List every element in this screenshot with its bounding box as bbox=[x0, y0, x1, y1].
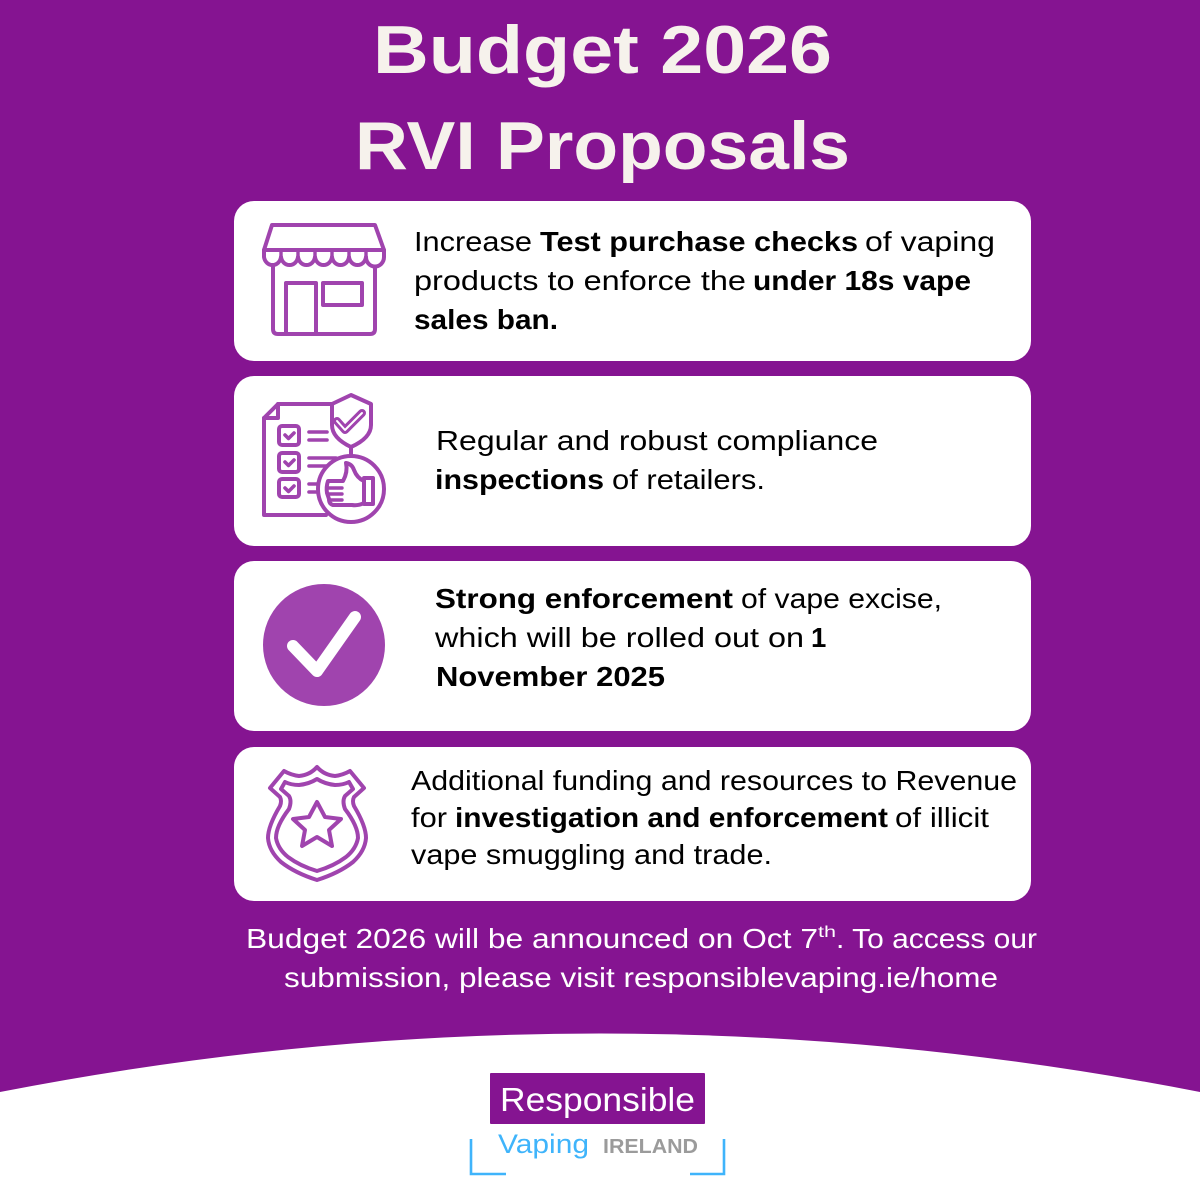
logo: Responsible Vaping Ireland bbox=[471, 1073, 724, 1174]
text: test purchase checks: under 18s vape bbox=[753, 265, 971, 296]
text: funding and resources bbox=[411, 765, 1017, 870]
text: excise enforcement: which will be rolled out on bbox=[434, 622, 804, 653]
text: compliance inspections: inspections bbox=[435, 464, 604, 495]
announcement text bbox=[246, 923, 1037, 993]
text: excise enforcement: 1 bbox=[811, 622, 826, 653]
announcement text: . To access our bbox=[836, 923, 1037, 954]
logo: Responsible Vaping Ireland: Vaping bbox=[498, 1129, 589, 1159]
panel: funding and resources bbox=[234, 747, 1031, 901]
title: RVI Proposals bbox=[355, 108, 850, 184]
panel: compliance inspections bbox=[234, 376, 1031, 546]
white curved footer area bbox=[0, 1034, 1200, 1200]
announcement text: th bbox=[818, 924, 836, 941]
text: funding and resources: Additional funding and resources to Revenue bbox=[411, 765, 1017, 796]
text: test purchase checks: Increase bbox=[414, 226, 532, 257]
logo: Responsible Vaping Ireland: IRELAND bbox=[603, 1136, 698, 1158]
text: excise enforcement: Strong enforcement bbox=[435, 583, 733, 614]
text: compliance inspections: of retailers. bbox=[612, 464, 765, 495]
icon: check mark circle bbox=[263, 584, 385, 706]
logo: Responsible Vaping Ireland: Responsible bbox=[500, 1081, 695, 1118]
text: test purchase checks: of vaping bbox=[865, 226, 995, 257]
title: Budget 2026 bbox=[373, 12, 832, 88]
text: test purchase checks: products to enforce the bbox=[414, 265, 746, 296]
text: test purchase checks: sales ban. bbox=[414, 304, 558, 335]
text: funding and resources: investigation and enforcement bbox=[455, 802, 888, 833]
text: excise enforcement bbox=[434, 583, 942, 692]
panel: test purchase checks bbox=[234, 201, 1031, 361]
text: compliance inspections: Regular and robust compliance bbox=[436, 425, 878, 456]
icon: checklist with shield and thumbs up bbox=[264, 395, 384, 522]
icon: police badge bbox=[268, 767, 366, 880]
text: test purchase checks bbox=[414, 226, 995, 335]
announcement text: submission, please visit responsiblevaping.ie/home bbox=[284, 962, 998, 993]
text: funding and resources: vape smuggling and trade. bbox=[411, 839, 772, 870]
panel: excise enforcement bbox=[234, 561, 1031, 731]
text: excise enforcement: of vape excise, bbox=[741, 583, 942, 614]
text: funding and resources: for bbox=[411, 802, 447, 833]
text: test purchase checks: Test purchase checks bbox=[540, 226, 858, 257]
text: excise enforcement: November 2025 bbox=[436, 661, 665, 692]
text: funding and resources: of illicit bbox=[895, 802, 989, 833]
icon: shop front bbox=[264, 225, 384, 334]
title bbox=[355, 12, 850, 184]
text: compliance inspections bbox=[435, 425, 878, 495]
announcement text: Budget 2026 will be announced on Oct 7 bbox=[246, 923, 818, 954]
